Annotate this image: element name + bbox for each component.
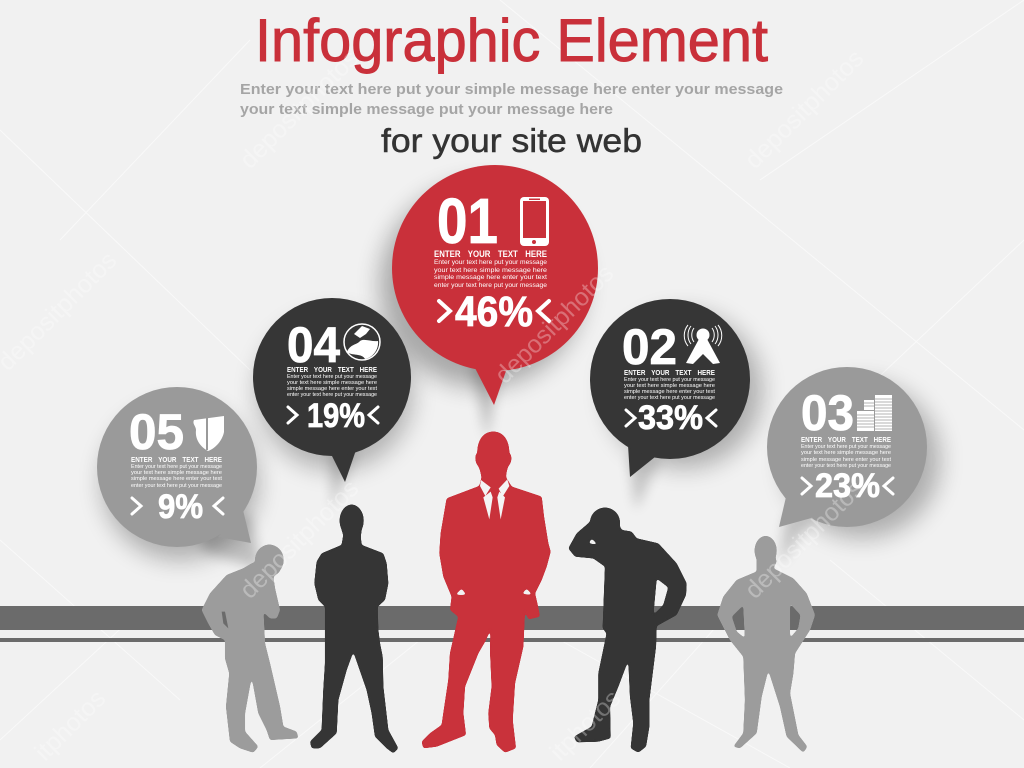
heading and body text: simple message here enter your text <box>801 457 891 463</box>
percentage 19%: 19% <box>307 397 365 435</box>
heading and body text <box>287 365 377 398</box>
bubble 02: dark <box>590 299 750 477</box>
text: itphotos <box>544 685 626 766</box>
heading and body text: ENTER YOUR TEXT HERE <box>434 249 547 259</box>
figure: grey man, hands on hips <box>717 536 815 753</box>
bubble 05: grey <box>97 387 257 547</box>
heading and body text <box>801 435 891 469</box>
heading and body text: your text here simple message here <box>801 450 891 456</box>
heading and body text: ENTER YOUR TEXT HERE <box>287 365 377 374</box>
icon: office buildings <box>857 395 892 431</box>
heading and body text <box>434 249 547 289</box>
heading and body text: Enter your text here put your message <box>131 464 222 470</box>
number 04: 04 <box>287 317 340 373</box>
icon: radio tower <box>684 325 722 364</box>
text: depositphotos <box>489 259 619 389</box>
subtitle text block <box>240 81 783 118</box>
horizontal bars <box>0 606 1024 642</box>
text: depositphotos <box>234 44 364 174</box>
subtitle text block: your text simple message put your message here <box>240 101 613 118</box>
heading and body text: enter your text here put your message <box>801 463 891 469</box>
icon: globe <box>344 324 380 360</box>
bubble 03: grey <box>767 367 927 527</box>
heading and body text: enter your text here put your message <box>287 392 377 398</box>
heading and body text: your text here simple message here <box>624 383 715 389</box>
heading and body text: enter your text here put your message <box>624 395 715 401</box>
percentage 9% <box>132 488 223 526</box>
heading and body text: simple message here enter your text <box>624 389 715 395</box>
heading and body text: ENTER YOUR TEXT HERE <box>131 455 222 464</box>
heading and body text: simple message here enter your text <box>131 476 222 482</box>
number 05: 05 <box>129 404 184 460</box>
bubble shadows <box>102 183 940 570</box>
figure: grey man, hand to face <box>202 545 298 753</box>
heading and body text: Enter your text here put your message <box>434 259 547 266</box>
text: depositphotos <box>739 44 869 174</box>
heading and body text: ENTER YOUR TEXT HERE <box>624 368 715 377</box>
bubble 01: red <box>392 165 598 405</box>
title: Infographic Element <box>255 7 768 74</box>
subtitle text block: Enter your text here put your simple message here enter your message <box>240 81 783 98</box>
heading and body text: Enter your text here put your message <box>624 377 715 383</box>
bubble 04: dark <box>253 298 411 482</box>
heading and body text: enter your text here put your message <box>434 282 547 289</box>
figure: dark man, hand on head <box>568 508 687 753</box>
heading and body text: simple message here enter your text <box>434 274 547 281</box>
number 03: 03 <box>801 385 854 441</box>
text: itphotos <box>29 685 111 766</box>
percentage 9%: 9% <box>158 488 203 526</box>
heading and body text: Enter your text here put your message <box>801 444 891 450</box>
percentage 46%: 46% <box>455 288 533 336</box>
heading and body text: ENTER YOUR TEXT HERE <box>801 435 891 444</box>
heading and body text: your text here simple message here <box>434 267 547 274</box>
heading and body text <box>624 368 715 401</box>
icon: smartphone <box>520 197 549 246</box>
heading and body text: Enter your text here put your message <box>287 374 377 380</box>
heading and body text <box>131 455 222 489</box>
text: depositphotos <box>739 474 869 604</box>
heading and body text: enter your text here put your message <box>131 483 222 489</box>
tagline: for your site web <box>381 122 642 159</box>
text: depositphotos <box>234 474 364 604</box>
heading and body text: your text here simple message here <box>287 380 377 386</box>
percentage 23%: 23% <box>815 467 880 505</box>
heading and body text: your text here simple message here <box>131 470 222 476</box>
icon: shield <box>193 416 224 451</box>
heading and body text: simple message here enter your text <box>287 386 377 392</box>
percentage 33%: 33% <box>638 399 703 437</box>
figure: dark man, arms crossed <box>310 505 398 753</box>
number 02: 02 <box>622 319 677 375</box>
number 01: 01 <box>437 185 498 257</box>
figure: red businessman <box>422 432 551 753</box>
